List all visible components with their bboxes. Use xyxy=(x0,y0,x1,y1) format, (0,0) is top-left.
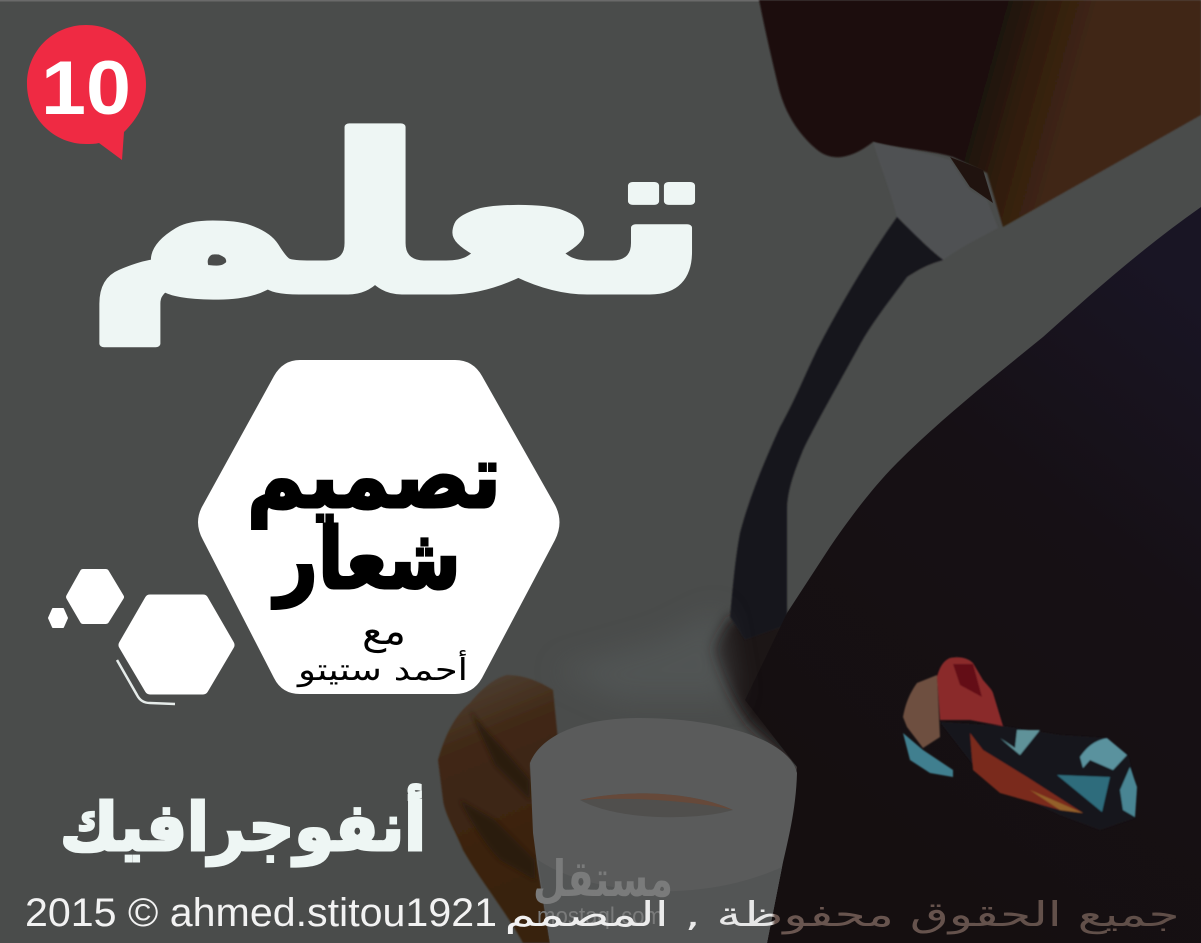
neck shadow xyxy=(950,157,993,203)
hexagon cluster xyxy=(49,572,229,689)
number: 10 xyxy=(41,46,131,131)
cup lower band xyxy=(538,860,782,943)
watermark logo: مستقل xyxy=(533,850,673,908)
finger shadow xyxy=(470,710,530,800)
finger shadow lower xyxy=(460,800,535,880)
fold teal triangle xyxy=(1057,775,1110,812)
with: مع xyxy=(362,609,406,654)
hexagon: medium xyxy=(124,600,229,689)
footer date and handle: 2015 © ahmed.stitou1921 xyxy=(25,891,497,935)
footer Arabic credit: جميع الحقوق محفوظة , المصمم xyxy=(504,895,1180,935)
cup body xyxy=(530,718,797,943)
coffee brown edge xyxy=(580,793,733,810)
fold teal strip xyxy=(1120,767,1137,817)
fold red xyxy=(937,657,1003,726)
accent line xyxy=(117,660,175,704)
watermark url: mostaql.com xyxy=(537,903,663,930)
main hexagon panel xyxy=(198,360,560,694)
bubble xyxy=(27,25,146,160)
fold orange streak xyxy=(1030,790,1083,813)
footer copyright xyxy=(25,891,1180,935)
fold navy xyxy=(940,722,1137,830)
fold teal middle xyxy=(1000,730,1040,755)
sleeve shadow xyxy=(713,617,800,770)
fold teal right xyxy=(1080,738,1127,770)
title: تعلم xyxy=(84,91,712,344)
badge: number 10 in red speech bubble xyxy=(27,25,146,160)
beard and neck xyxy=(759,0,1201,227)
hand shape xyxy=(438,675,560,943)
cup xyxy=(530,718,797,943)
author name: أحمد ستيتو xyxy=(296,649,468,688)
heading line 1: تصميم xyxy=(247,425,501,529)
heading line 2: شعار xyxy=(271,510,461,609)
infographic label: أنفوجرافيك xyxy=(60,784,426,867)
fold teal left xyxy=(903,733,953,777)
fold dark red xyxy=(953,664,982,697)
pocket square xyxy=(903,657,1137,830)
hand xyxy=(438,675,560,943)
fold brown xyxy=(903,675,940,748)
coffee xyxy=(580,793,733,817)
photo: man in suit holding a cup xyxy=(438,0,1201,943)
collar knot xyxy=(873,142,998,260)
steam xyxy=(555,610,735,700)
jacket xyxy=(745,207,1201,943)
tie xyxy=(730,217,943,640)
hexagon: small xyxy=(69,572,121,621)
hexagon shape xyxy=(198,360,560,694)
watermark xyxy=(533,850,673,930)
fold red streak xyxy=(970,733,1083,813)
hexagon: tiny xyxy=(49,609,67,627)
top edge line xyxy=(0,0,1201,2)
